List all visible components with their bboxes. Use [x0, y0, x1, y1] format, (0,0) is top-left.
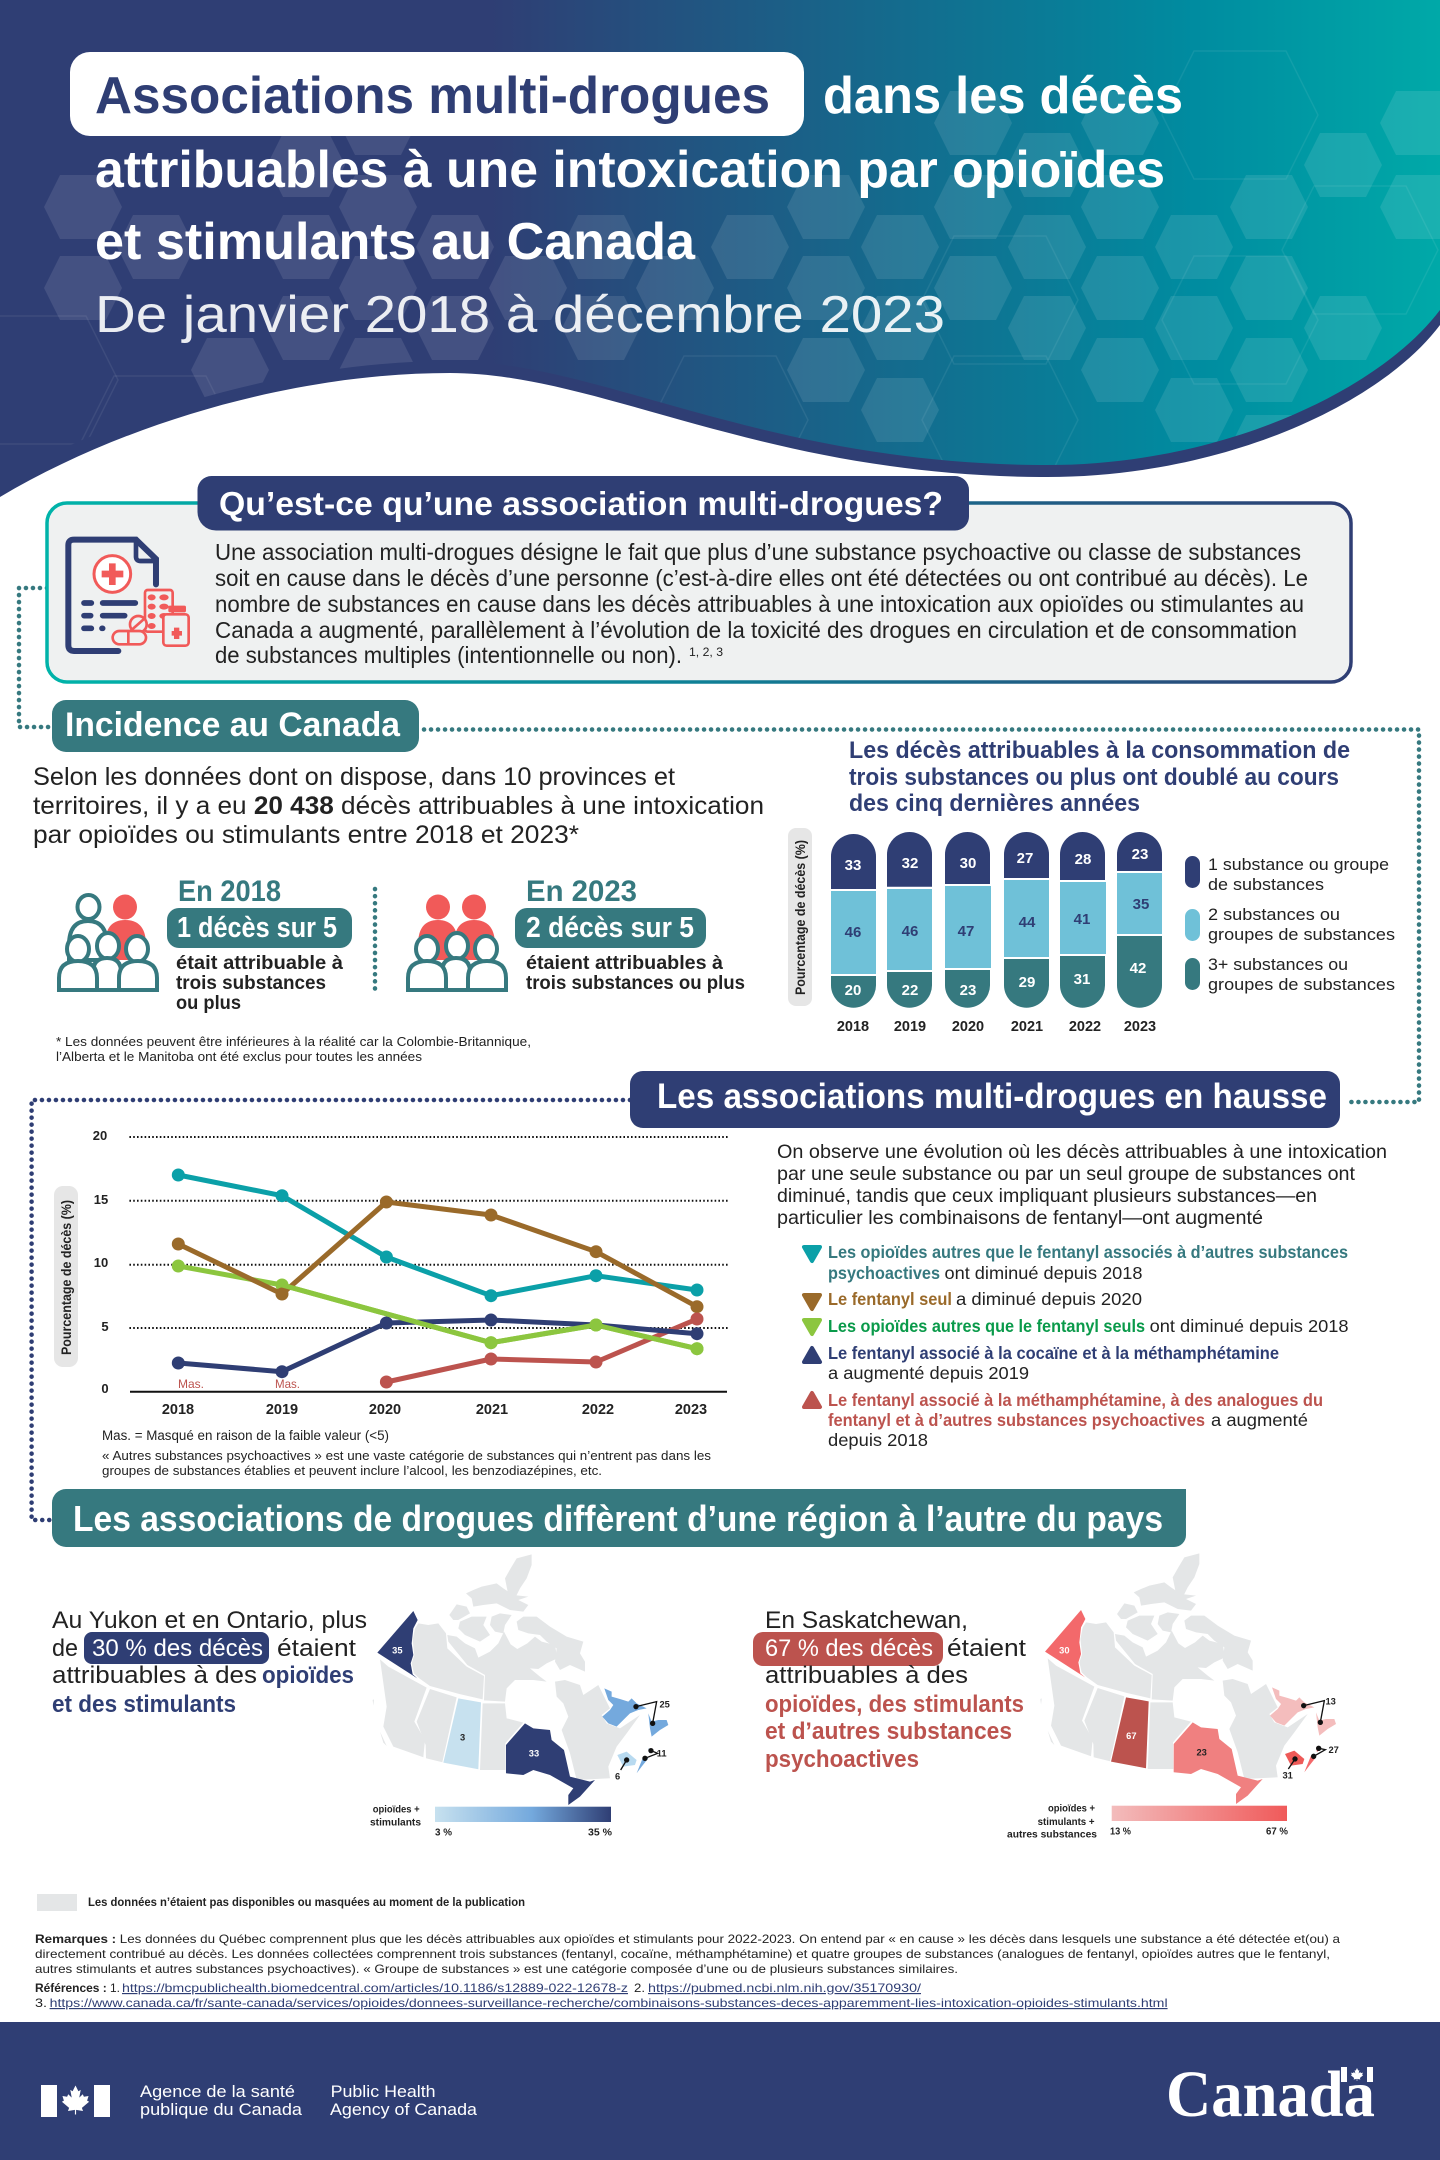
- bar values: 33: [845, 857, 861, 874]
- text: definition: 1, 2, 3: [689, 645, 723, 659]
- text: Yukon and Ontario: et des stimulants: [52, 1691, 236, 1718]
- bar 2020: [945, 832, 991, 1008]
- stat: 2023: En 2023: [526, 875, 637, 908]
- trend item: fentanyl meth analogues: a augmenté: [1211, 1410, 1308, 1430]
- icon: medical document and pills: [68, 540, 189, 651]
- y axis ticks: [93, 1128, 109, 1396]
- text: Saskatchewan: 67 % des décès: [765, 1635, 933, 1662]
- text: Yukon and Ontario: [52, 1607, 367, 1718]
- bar values: 35: [1133, 896, 1149, 913]
- x axis years: 2020: [369, 1402, 401, 1418]
- line chart: [54, 1128, 728, 1418]
- stat: 2018: 1 décès sur 5: [177, 912, 337, 944]
- notes: Remarques : Les données du Québec comprennent plus que les décès attribuables aux opioïdes et stimulants pour 2022-2023. On entend par « en cause » les décès dans lesquels une substance a été détectée et(ou) a: [35, 1933, 1341, 1946]
- heading: stacked chart: des cinq dernières années: [849, 790, 1140, 817]
- bar values: 22: [902, 982, 918, 999]
- bar values: 23: [960, 982, 976, 999]
- stat: 2018: ou plus: [176, 993, 241, 1014]
- stacked bar chart: Pourcentage de décès (%): [793, 840, 808, 995]
- bar values: 30: [960, 855, 976, 872]
- header banner: [0, 0, 1440, 504]
- agency names: Public Health: [331, 2082, 436, 2101]
- text: Yukon and Ontario: Au Yukon et en Ontario, plus: [52, 1607, 367, 1634]
- map: opioids stimulants and others: [1040, 1553, 1339, 1804]
- map: opioids stimulants and others: 27: [1328, 1745, 1339, 1755]
- masked labels: Mas.: [178, 1377, 204, 1391]
- text: Saskatchewan: étaient: [947, 1635, 1026, 1662]
- map: opioids and stimulants: 33: [529, 1749, 539, 1759]
- panel: definition: [47, 476, 1351, 682]
- stat: 2018: [167, 875, 352, 1014]
- stat: 2018: En 2018: [178, 875, 281, 908]
- x axis years: 2021: [476, 1402, 508, 1418]
- heading: definition: Qu’est-ce qu’une association multi-drogues?: [219, 485, 943, 522]
- y axis title: [54, 1186, 78, 1367]
- icon: people 2023: [408, 894, 506, 990]
- text: Saskatchewan: En Saskatchewan,: [765, 1607, 968, 1634]
- text: definition: de substances multiples (intentionnelle ou non).: [215, 642, 682, 668]
- trend item: fentanyl cocaine meth: a augmenté depuis 2019: [828, 1363, 1029, 1383]
- trend item: fentanyl meth analogues: Le fentanyl associé à la méthamphétamine, à des analogues du: [828, 1390, 1323, 1410]
- stat: 2023: [515, 875, 745, 994]
- legend: red scale: opioïdes +: [1048, 1803, 1095, 1815]
- agency names: Agency of Canada: [330, 2100, 478, 2119]
- legend: no data: [37, 1894, 525, 1911]
- chart notes: Mas. = Masqué en raison de la faible valeur (<5): [102, 1428, 389, 1443]
- bar values: 28: [1075, 851, 1091, 868]
- legend: red scale: [1007, 1803, 1289, 1841]
- agency names: [140, 2082, 478, 2119]
- legend: no data: Les données n’étaient pas disponibles ou masquées au moment de la publication: [88, 1897, 525, 1909]
- Canada wordmark: Canada: [1166, 2058, 1375, 2131]
- heading: regional: [52, 1489, 1186, 1547]
- trend item: opioids alone: Les opioïdes autres que le fentanyl seuls: [828, 1316, 1145, 1336]
- notes: directement contribué au décès. Les données collectées comprennent trois substances (fentanyl, cocaïne, méthamphétamine) et quatre groupes de substances (analogues de fentanyl, opioïdes autres que le fentanyl,: [35, 1948, 1330, 1961]
- text: Yukon and Ontario: 30 % des décès: [92, 1635, 263, 1662]
- title: attribuables à une intoxication par opioïdes: [95, 141, 1165, 199]
- legend: stacked chart: groupes de substances: [1208, 926, 1395, 944]
- chart notes: « Autres substances psychoactives » est une vaste catégorie de substances qui n’entrent pas dans les: [102, 1448, 712, 1463]
- title: dans les décès: [823, 67, 1183, 125]
- legend: stacked chart: 1 substance ou groupe: [1208, 856, 1389, 874]
- references: 2.: [634, 1982, 645, 1995]
- bar year labels: 2022: [1069, 1019, 1101, 1035]
- references: https://www.canada.ca/fr/sante-canada/services/opioides/donnees-surveillance-recherche/combinaisons-substances-deces-apparemment-lies-intoxication-opioides-stimulants.html: [50, 1997, 1168, 2010]
- x axis years: 2023: [675, 1402, 707, 1418]
- legend: blue scale: 35 %: [588, 1827, 613, 1839]
- map: opioids stimulants and others: 31: [1282, 1771, 1293, 1781]
- text: trend summary: [777, 1141, 1387, 1229]
- bar values: 27: [1017, 850, 1033, 867]
- legend: red scale: 67 %: [1266, 1826, 1289, 1838]
- trend item: opioids with others: [804, 1242, 1348, 1283]
- footnote: * Les données peuvent être inférieures à la réalité car la Colombie-Britannique,: [56, 1035, 531, 1049]
- map: opioids and stimulants: 35: [392, 1646, 403, 1656]
- heading: regional: Les associations de drogues diffèrent d’une région à l’autre du pays: [73, 1498, 1163, 1539]
- heading: rising: [630, 1071, 1340, 1128]
- series: green: [172, 1260, 704, 1355]
- text: definition: nombre de substances en cause dans les décès attribuables à une intoxication aux opioïdes ou stimulantes au: [215, 591, 1304, 617]
- text: Saskatchewan: [753, 1607, 1026, 1773]
- text: definition: [215, 539, 1308, 668]
- series: red: [380, 1312, 704, 1388]
- bar values: 42: [1130, 960, 1146, 977]
- text: Saskatchewan: psychoactives: [765, 1746, 919, 1773]
- trend item: fentanyl alone: a diminué depuis 2020: [956, 1289, 1142, 1309]
- trend item: opioids alone: ont diminué depuis 2018: [1150, 1316, 1349, 1336]
- notes: autres stimulants et autres substances psychoactives). « Groupe de substances » est une catégorie composée d’une ou de plusieurs substances similaires.: [35, 1963, 958, 1976]
- masked labels: [178, 1377, 300, 1391]
- footnote: [56, 1035, 531, 1064]
- title: Associations multi-drogues: [95, 67, 770, 125]
- trend item: fentanyl meth analogues: depuis 2018: [828, 1430, 928, 1450]
- bar year labels: 2020: [952, 1019, 984, 1035]
- title: et stimulants au Canada: [95, 213, 696, 271]
- heading: stacked chart: Les décès attribuables à la consommation de: [849, 737, 1350, 764]
- bar year labels: 2018: [837, 1019, 869, 1035]
- text: Saskatchewan: attribuables à des: [765, 1662, 968, 1689]
- text: trend summary: On observe une évolution où les décès attribuables à une intoxication: [777, 1141, 1387, 1163]
- series: navy: [172, 1314, 704, 1378]
- footer band: [0, 2022, 1440, 2160]
- heading: stacked chart: trois substances ou plus ont doublé au cours: [849, 764, 1339, 791]
- heading: definition: [198, 476, 969, 530]
- stat: 2023: 2 décès sur 5: [526, 912, 694, 944]
- text: incidence intro: par opioïdes ou stimulants entre 2018 et 2023*: [33, 821, 579, 849]
- trend item: fentanyl cocaine meth: Le fentanyl associé à la cocaïne et à la méthamphétamine: [828, 1343, 1279, 1363]
- trend item: opioids with others: Les opioïdes autres que le fentanyl associés à d’autres substances: [828, 1242, 1348, 1262]
- bar values: 47: [958, 923, 974, 940]
- references: https://bmcpublichealth.biomedcentral.com/articles/10.1186/s12889-022-12678-z: [122, 1982, 628, 1995]
- heading: rising: Les associations multi-drogues en hausse: [657, 1077, 1327, 1116]
- bar 2021: [1004, 832, 1049, 1008]
- legend: stacked chart: [1185, 856, 1395, 994]
- text: trend summary: par une seule substance ou par un seul groupe de substances ont: [777, 1163, 1356, 1185]
- dotted connector teal: [19, 588, 1419, 1102]
- chart notes: groupes de substances établies et peuvent inclure l’alcool, les benzodiazépines, etc.: [102, 1463, 602, 1478]
- heading: stacked chart: [849, 737, 1350, 817]
- series: teal: [172, 1168, 704, 1302]
- legend: blue scale: [370, 1804, 613, 1839]
- masked labels: Mas.: [275, 1377, 300, 1391]
- map: opioids stimulants and others: 67: [1126, 1731, 1137, 1741]
- bar values: [845, 846, 1149, 999]
- trend item: fentanyl alone: Le fentanyl seul: [828, 1289, 952, 1309]
- text: Saskatchewan: opioïdes, des stimulants: [765, 1691, 1024, 1718]
- bar values: 31: [1074, 971, 1090, 988]
- references: 3.: [35, 1997, 47, 2010]
- map: opioids stimulants and others: 30: [1059, 1646, 1070, 1656]
- x axis years: 2019: [266, 1402, 298, 1418]
- trend item: opioids with others: ont diminué depuis 2018: [944, 1263, 1142, 1283]
- text: trend summary: diminué, tandis que ceux impliquant plusieurs substances—en: [777, 1185, 1317, 1207]
- text: Saskatchewan: et d’autres substances: [765, 1718, 1012, 1745]
- legend: stacked chart: groupes de substances: [1208, 976, 1395, 994]
- text: Yukon and Ontario: opioïdes: [262, 1662, 354, 1689]
- bar values: 20: [845, 982, 861, 999]
- legend: red scale: 13 %: [1110, 1826, 1132, 1838]
- bar values: 41: [1074, 911, 1090, 928]
- agency names: publique du Canada: [140, 2100, 303, 2119]
- bar year labels: 2023: [1124, 1019, 1156, 1035]
- series: brown: [172, 1196, 704, 1313]
- legend: blue scale: 3 %: [435, 1827, 453, 1839]
- green overlay segment: [282, 1285, 704, 1355]
- title: De janvier 2018 à décembre 2023: [95, 286, 945, 344]
- notes: [35, 1933, 1341, 1976]
- y axis ticks: 15: [94, 1192, 108, 1207]
- map: opioids stimulants and others: 13: [1325, 1697, 1336, 1707]
- text: incidence intro: [33, 763, 764, 849]
- text: definition: soit en cause dans le décès d’une personne (c’est-à-dire elles ont été détectées ou ont contribué au décès). Le: [215, 565, 1308, 591]
- bar values: 46: [902, 923, 918, 940]
- trend item: fentanyl cocaine meth: [804, 1343, 1279, 1383]
- bar values: 23: [1132, 846, 1148, 863]
- heading: incidence: Incidence au Canada: [65, 706, 401, 744]
- map: opioids and stimulants: 25: [659, 1699, 670, 1709]
- references: https://pubmed.ncbi.nlm.nih.gov/35170930/: [648, 1982, 922, 1995]
- stat: 2018: était attribuable à: [176, 953, 343, 974]
- legend: blue scale: opioïdes +: [373, 1804, 420, 1816]
- trend item: opioids with others: psychoactives: [828, 1263, 940, 1283]
- references: Références : 1.: [35, 1982, 120, 1995]
- bar year labels: 2019: [894, 1019, 926, 1035]
- legend: blue scale: stimulants: [370, 1817, 421, 1829]
- y axis ticks: 5: [101, 1319, 109, 1334]
- map: opioids and stimulants: 6: [615, 1771, 620, 1781]
- y axis ticks: 20: [93, 1128, 107, 1143]
- bar 2019: [887, 832, 932, 1008]
- bar year labels: [837, 1019, 1156, 1035]
- y axis ticks: 10: [94, 1255, 108, 1270]
- stat: 2023: trois substances ou plus: [526, 973, 745, 994]
- map: opioids and stimulants: 11: [657, 1748, 667, 1758]
- title: [70, 52, 1183, 344]
- legend: red scale: stimulants +: [1038, 1816, 1095, 1828]
- bar 2018: [831, 834, 876, 1008]
- text: trend summary: particulier les combinaisons de fentanyl—ont augmenté: [777, 1207, 1263, 1229]
- dotted connector navy: [32, 1100, 630, 1520]
- bar values: 29: [1019, 974, 1035, 991]
- bar 2023: [1117, 832, 1162, 1008]
- logo: Canadian flag symbol: [41, 2085, 110, 2117]
- stacked bar chart: [788, 828, 1162, 1035]
- x axis years: [162, 1402, 707, 1418]
- text: Yukon and Ontario: attribuables à des: [52, 1662, 257, 1689]
- x axis years: 2022: [582, 1402, 614, 1418]
- stat: 2018: trois substances: [176, 973, 326, 994]
- bar values: 46: [845, 924, 861, 941]
- trend item: fentanyl meth analogues: fentanyl et à d’autres substances psychoactives: [828, 1410, 1205, 1430]
- chart notes: [102, 1428, 712, 1478]
- bar year labels: 2021: [1011, 1019, 1043, 1035]
- legend: red scale: autres substances: [1007, 1829, 1097, 1841]
- icon: people 2018: [59, 894, 157, 990]
- legend: stacked chart: de substances: [1208, 876, 1324, 894]
- stat: 2023: étaient attribuables à: [526, 953, 723, 974]
- trend item: fentanyl alone: [804, 1289, 1142, 1309]
- map: opioids and stimulants: 3: [460, 1733, 465, 1743]
- heading: incidence: [52, 700, 419, 752]
- legend: stacked chart: 2 substances ou: [1208, 906, 1340, 924]
- text: Yukon and Ontario: de: [52, 1635, 78, 1662]
- trend item: fentanyl meth analogues: [804, 1390, 1323, 1450]
- x axis years: 2018: [162, 1402, 194, 1418]
- trend item: opioids alone: [804, 1316, 1349, 1336]
- bar values: 44: [1019, 914, 1036, 931]
- references: [35, 1982, 1168, 2010]
- text: definition: Une association multi-drogues désigne le fait que plus d’une substance psychoactive ou classe de substances: [215, 539, 1301, 565]
- bar values: 32: [902, 855, 918, 872]
- text: incidence intro: Selon les données dont on dispose, dans 10 provinces et: [33, 763, 675, 791]
- footnote: l’Alberta et le Manitoba ont été exclus pour toutes les années: [56, 1050, 422, 1064]
- text: definition: Canada a augmenté, parallèlement à l’évolution de la toxicité des drogues en circulation et de consommation: [215, 617, 1297, 643]
- legend: stacked chart: 3+ substances ou: [1208, 956, 1348, 974]
- bar 2022: [1060, 832, 1106, 1008]
- map: opioids stimulants and others: 23: [1196, 1747, 1207, 1757]
- agency names: Agence de la santé: [140, 2082, 295, 2101]
- y axis ticks: 0: [101, 1381, 109, 1396]
- text: incidence intro: territoires, il y a eu 20 438 décès attribuables à une intoxication: [33, 792, 764, 820]
- map: opioids and stimulants: [373, 1554, 670, 1805]
- y axis title: Pourcentage de décès (%): [59, 1200, 74, 1355]
- text: Yukon and Ontario: étaient: [277, 1635, 356, 1662]
